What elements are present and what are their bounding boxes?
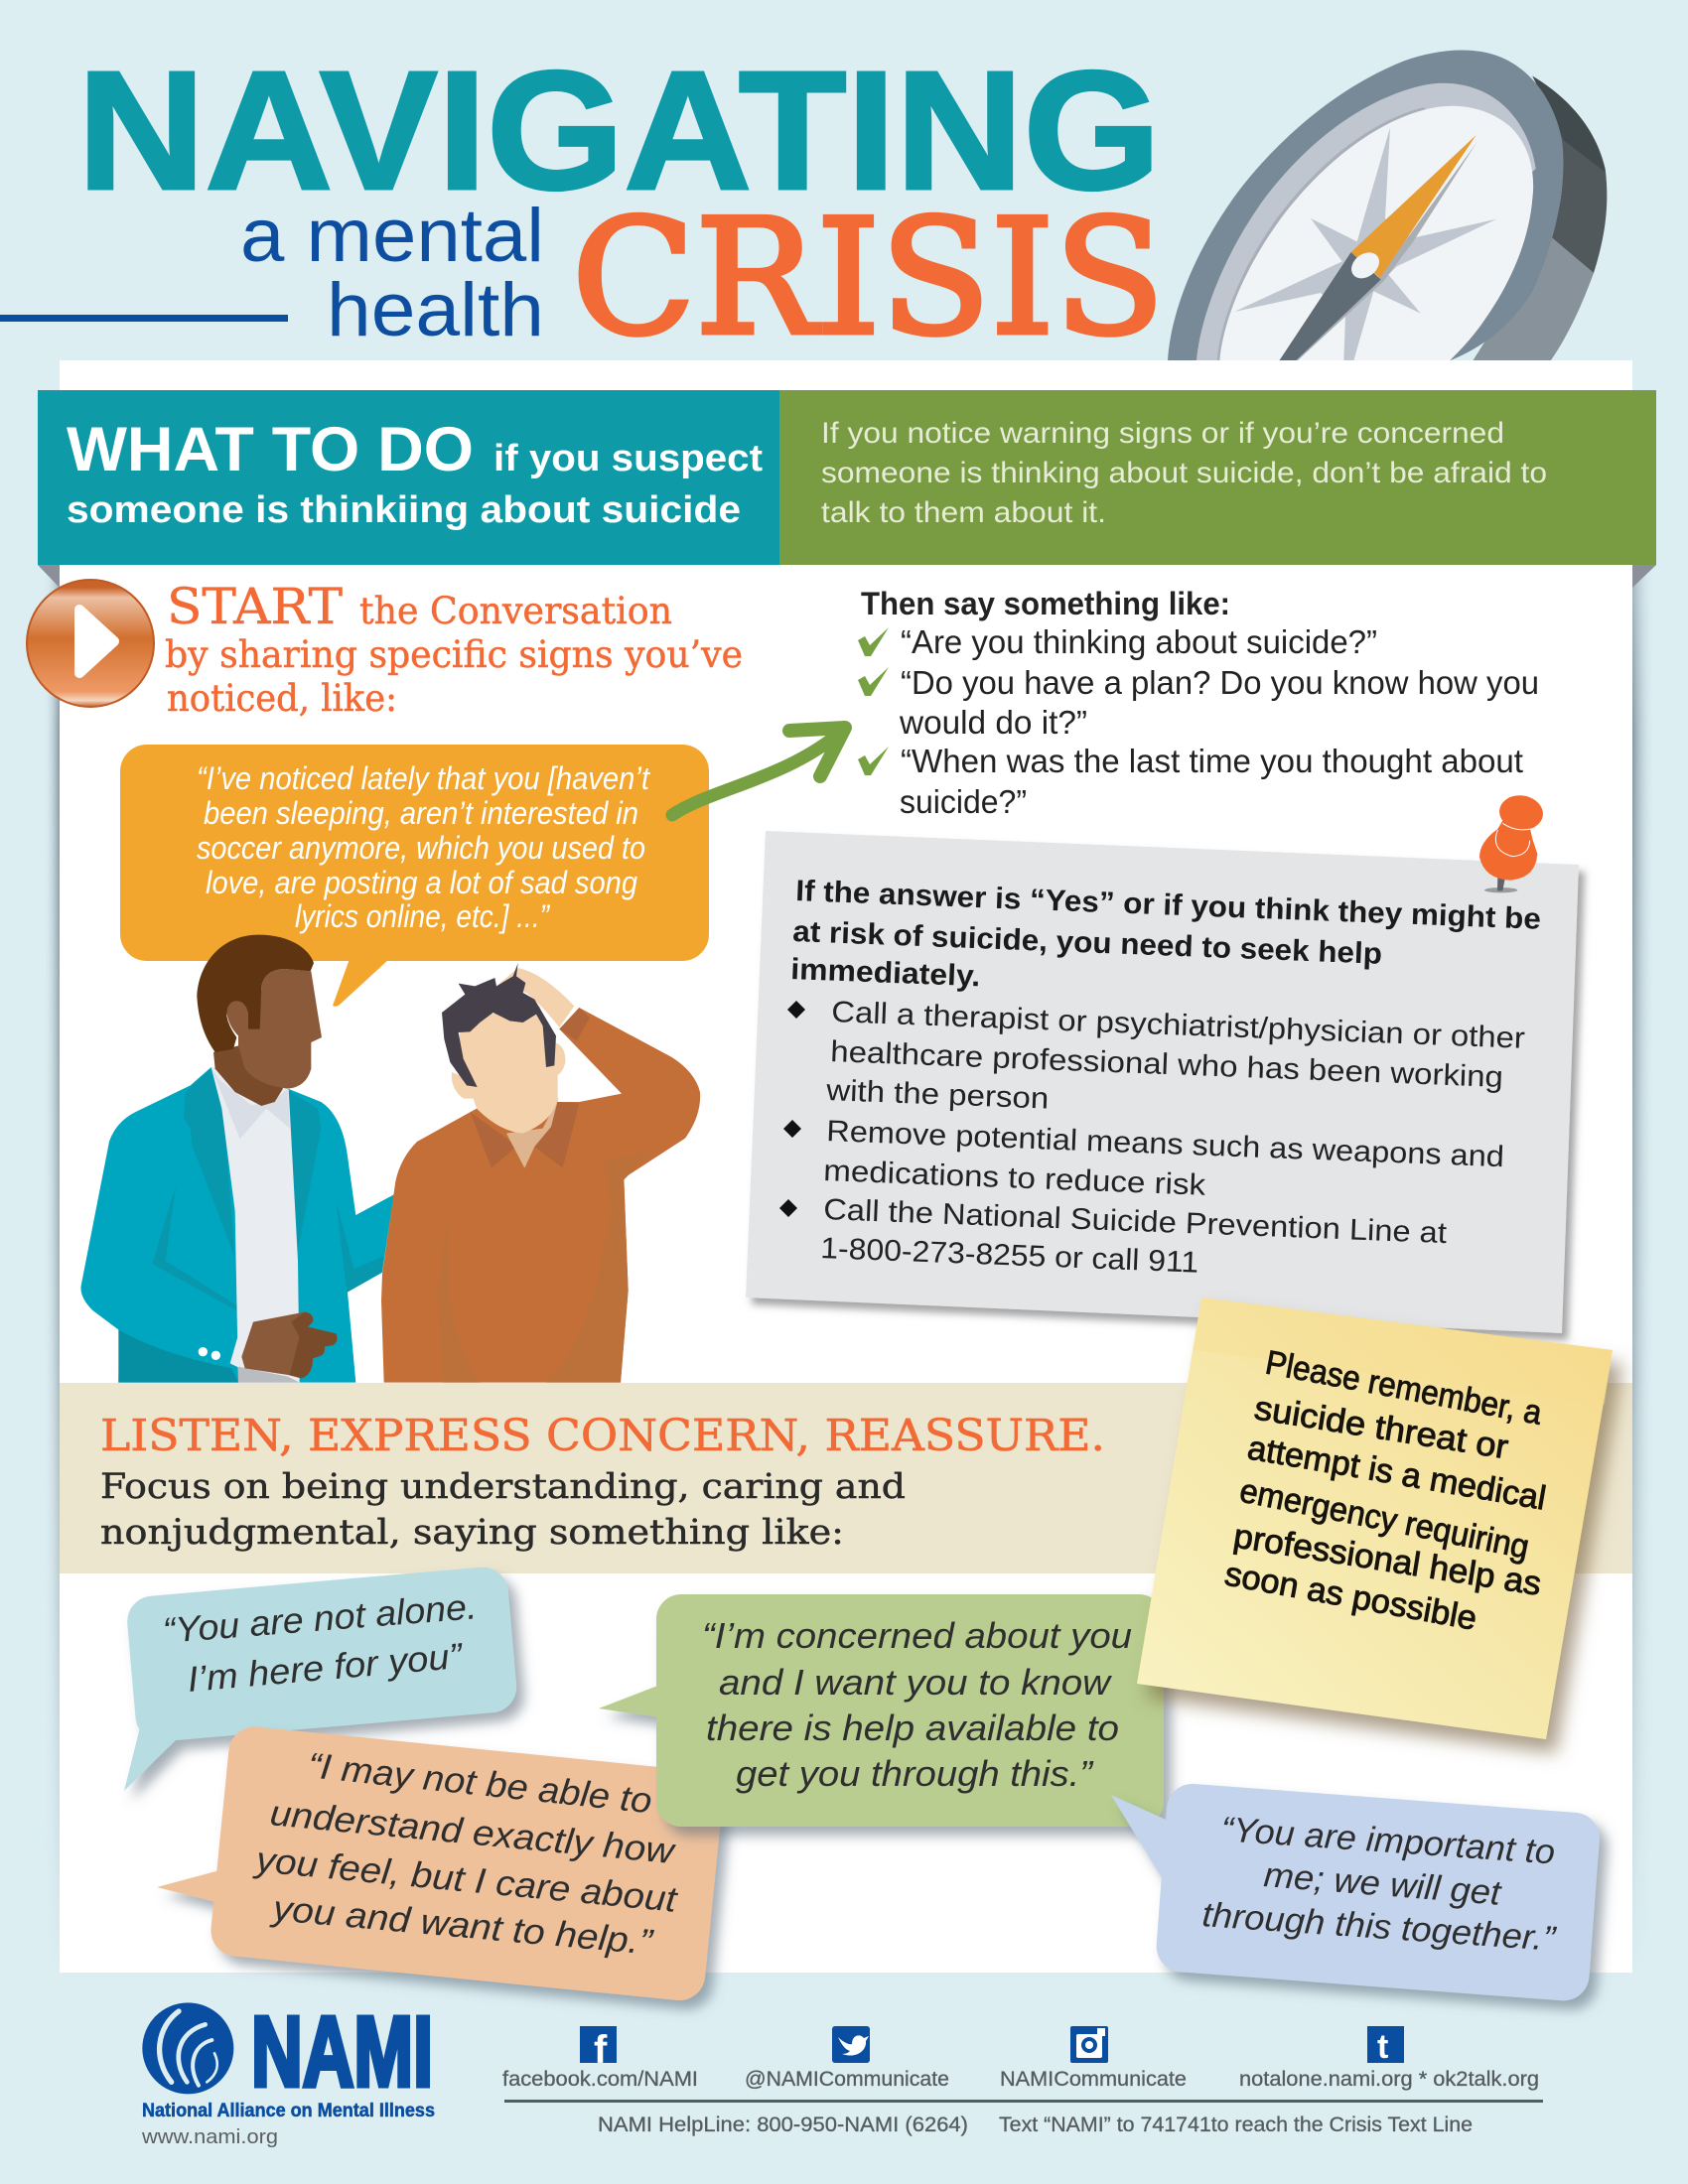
sticky note text: suicide threat or [1252, 1389, 1511, 1466]
title line: navigating: NAVIGATING [77, 37, 1161, 225]
icon: twitter [832, 2026, 870, 2063]
logo: NAMI: www.nami.org [141, 2126, 278, 2148]
text: focus on being understanding: Focus on being understanding, caring and [100, 1467, 906, 1507]
speech bubble: may not understand: you and want to help.” [268, 1887, 656, 1963]
icon: check marks [858, 627, 889, 775]
title [0, 37, 1165, 370]
title line: crisis: CRISIS [572, 185, 1165, 370]
speech bubble: you are important: me; we will get [1262, 1855, 1503, 1913]
speech bubble: concerned about you: there is help available to [706, 1707, 1119, 1748]
speech bubble: noticed lately: love, are posting a lot of sad song [206, 865, 637, 900]
text: then say something like: “Do you have a plan? Do you know how you [901, 664, 1539, 701]
note bullet list: Remove potential means such as weapons and [826, 1115, 1504, 1173]
heading: if you suspect: if you suspect [493, 438, 763, 479]
note heading: at risk of suicide, you need to seek help [792, 915, 1383, 971]
footer labels: NAMICommunicate [1000, 2068, 1187, 2091]
speech bubble: noticed lately: “I’ve noticed lately that you [haven’t [197, 760, 650, 796]
note heading: immediately. [790, 953, 981, 993]
heading: start the conversation: the Conversation [359, 590, 672, 632]
heading: what to do: WHAT TO DO [67, 415, 474, 484]
text: then say something like: “When was the last time you thought about [901, 743, 1523, 779]
illustration: two people talking [80, 935, 700, 1383]
speech bubble: you are not alone: “You are not alone. [161, 1585, 479, 1651]
text: focus on being understanding [100, 1467, 906, 1553]
sticky note text: emergency requiring [1236, 1472, 1532, 1567]
speech bubble: noticed lately: lyrics online, etc.] ...” [295, 898, 550, 934]
logo: NAMI: National Alliance on Mental Illness [142, 2101, 435, 2121]
footer labels: facebook.com/NAMI [502, 2068, 698, 2091]
speech bubble: you are not alone: I’m here for you” [186, 1635, 466, 1700]
text: then say something like: would do it?” [899, 704, 1087, 741]
icon: compass [1168, 51, 1607, 360]
arrow: to then say [672, 728, 845, 815]
sticky note text: professional help as [1231, 1517, 1544, 1603]
figure: man in teal jacket [80, 935, 394, 1383]
panel: white page [44, 360, 1654, 1976]
speech bubble: may not understand [157, 1724, 726, 2003]
helpline text: NAMI HelpLine: 800-950-NAMI (6264) [598, 2114, 968, 2136]
text: then say something like [858, 586, 1539, 820]
sticky note text: Please remember, a [1263, 1344, 1545, 1433]
note bullet list: Call a therapist or psychiatrist/physician or other [831, 996, 1525, 1055]
text: then say something like: suicide?” [900, 783, 1027, 820]
helpline text [598, 2114, 1473, 2136]
speech bubble: noticed lately [120, 745, 709, 1007]
note heading: If the answer is “Yes” or if you think they might be [795, 875, 1541, 936]
beige band [60, 1383, 1632, 1573]
sticky note text: attempt is a medical [1245, 1429, 1549, 1518]
panel: what to do [38, 390, 779, 565]
title line: health: health [327, 268, 544, 352]
note bullet list: Call the National Suicide Prevention Line at [823, 1193, 1448, 1250]
text: focus on being understanding: nonjudgmental, saying something like: [100, 1513, 844, 1553]
icon: start button [27, 580, 154, 707]
heading: listen express concern reassure: LISTEN, EXPRESS CONCERN, REASSURE. [100, 1411, 1105, 1461]
panel: warning intro [779, 390, 1656, 565]
speech bubble: you are important: “You are important to [1219, 1810, 1556, 1871]
heading: start the conversation: noticed, like: [167, 677, 397, 720]
speech bubble: may not understand: understand exactly how [268, 1792, 677, 1871]
speech bubble: concerned about you [599, 1594, 1164, 1827]
note bullet list: healthcare professional who has been working [830, 1035, 1503, 1094]
helpline text: Text “NAMI” to 741741to reach the Crisis Text Line [999, 2114, 1473, 2136]
speech bubble: noticed lately: been sleeping, aren’t interested in [204, 795, 638, 831]
heading: start the conversation [165, 578, 743, 720]
intro text [821, 417, 1547, 529]
speech bubble: concerned about you: “I’m concerned about you [702, 1615, 1132, 1656]
text: then say something like: Then say something like: [861, 586, 1230, 621]
icon: tumblr [1367, 2026, 1404, 2066]
footer labels: notalone.nami.org * ok2talk.org [1239, 2068, 1539, 2091]
title line: a mental: a mental [240, 194, 544, 278]
speech bubble: concerned about you: get you through this.” [736, 1753, 1094, 1794]
header band [38, 390, 1656, 588]
figure: man scratching head [381, 963, 700, 1383]
speech bubble: noticed lately: soccer anymore, which you used to [197, 830, 645, 866]
footer labels [502, 2068, 1539, 2091]
speech bubble: you are important [1111, 1782, 1602, 2002]
logo: NAMI [141, 1996, 435, 2148]
speech bubble: may not understand: you feel, but I care about [251, 1839, 680, 1920]
speech bubble: concerned about you: and I want you to know [719, 1662, 1112, 1703]
icon: facebook [580, 2026, 617, 2072]
icon: push pin [1479, 792, 1545, 892]
speech bubble: may not understand: “I may not be able to [306, 1744, 654, 1821]
intro text: talk to them about it. [821, 496, 1106, 529]
footer labels: @NAMICommunicate [745, 2068, 949, 2091]
footer social links [502, 2026, 1543, 2136]
sticky note text: soon as possible [1222, 1555, 1479, 1638]
note heading [790, 875, 1541, 993]
intro text: someone is thinking about suicide, don’t be afraid to [821, 457, 1547, 489]
note bullet list: medications to reduce risk [823, 1155, 1207, 1202]
title rule [0, 315, 288, 322]
speech bubble: you are not alone [124, 1565, 518, 1791]
heading: start the conversation: START [167, 578, 343, 635]
speech bubble: you are important: through this together.” [1200, 1895, 1558, 1959]
logo mark [142, 2002, 233, 2094]
text: then say something like: “Are you thinking about suicide?” [901, 623, 1377, 660]
icon: tumblr: t [1377, 2028, 1388, 2066]
note: seek help immediately [746, 831, 1579, 1333]
sticky note text [1222, 1344, 1549, 1638]
sticky note [1137, 1297, 1613, 1739]
logo: NAMI: NAMI [251, 1996, 433, 2108]
icon: instagram [1070, 2026, 1108, 2063]
heading: someone is thinking: someone is thinkiing about suicide [67, 489, 741, 531]
icon: facebook: f [594, 2028, 608, 2072]
note bullet list [779, 996, 1525, 1280]
heading: start the conversation: by sharing specific signs you’ve [165, 633, 743, 676]
note bullet list: with the person [825, 1074, 1050, 1116]
note bullet list: 1-800-273-8255 or call 911 [820, 1232, 1199, 1280]
intro text: If you notice warning signs or if you’re concerned [821, 417, 1504, 450]
